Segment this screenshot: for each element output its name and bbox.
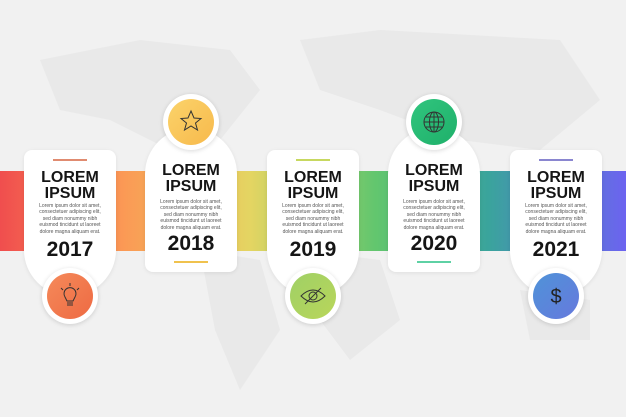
card 2021 bbox=[510, 150, 602, 296]
card 2018: IPSUM bbox=[166, 178, 216, 195]
icon: lightbulb bbox=[42, 268, 98, 324]
card 2020: 2020 bbox=[411, 232, 457, 255]
card 2017: Lorem ipsum dolor sit amet, consectetuer adipiscing elit, sed diam nonummy nibh euismod tincidunt ut laoreet dolore magna aliquam erat. bbox=[39, 203, 101, 235]
card 2019: Lorem ipsum dolor sit amet, consectetuer adipiscing elit, sed diam nonummy nibh euismod tincidunt ut laoreet dolore magna aliquam erat. bbox=[282, 203, 344, 235]
card 2019: 2019 bbox=[290, 238, 336, 261]
card 2021: Lorem ipsum dolor sit amet, consectetuer adipiscing elit, sed diam nonummy nibh euismod tincidunt ut laoreet dolore magna aliquam erat. bbox=[525, 203, 587, 235]
card 2018: LOREM bbox=[162, 162, 220, 179]
card 2018: Lorem ipsum dolor sit amet, consectetuer adipiscing elit, sed diam nonummy nibh euismod tincidunt ut laoreet dolore magna aliquam erat. bbox=[160, 199, 222, 231]
card 2021: IPSUM bbox=[531, 185, 581, 202]
card 2017: 2017 bbox=[47, 238, 93, 261]
card 2019: IPSUM bbox=[288, 185, 338, 202]
card 2018 bbox=[145, 128, 237, 272]
card 2021: LOREM bbox=[527, 169, 585, 186]
card 2020: IPSUM bbox=[409, 178, 459, 195]
card 2017: LOREM bbox=[41, 169, 99, 186]
card 2019 bbox=[267, 150, 359, 296]
icon: star bbox=[163, 94, 219, 150]
card 2020: Lorem ipsum dolor sit amet, consectetuer adipiscing elit, sed diam nonummy nibh euismod tincidunt ut laoreet dolore magna aliquam erat. bbox=[403, 199, 465, 231]
icon: globe bbox=[406, 94, 462, 150]
card 2017: IPSUM bbox=[45, 185, 95, 202]
icon: dollar: $ bbox=[550, 286, 562, 308]
card 2020 bbox=[388, 128, 480, 272]
card 2020: LOREM bbox=[405, 162, 463, 179]
card 2021: 2021 bbox=[533, 238, 579, 261]
icon: hidden eye bbox=[285, 268, 341, 324]
card 2018: 2018 bbox=[168, 232, 214, 255]
timeline band bbox=[0, 171, 626, 251]
card 2019: LOREM bbox=[284, 169, 342, 186]
icon: dollar bbox=[528, 268, 584, 324]
card 2017 bbox=[24, 150, 116, 296]
